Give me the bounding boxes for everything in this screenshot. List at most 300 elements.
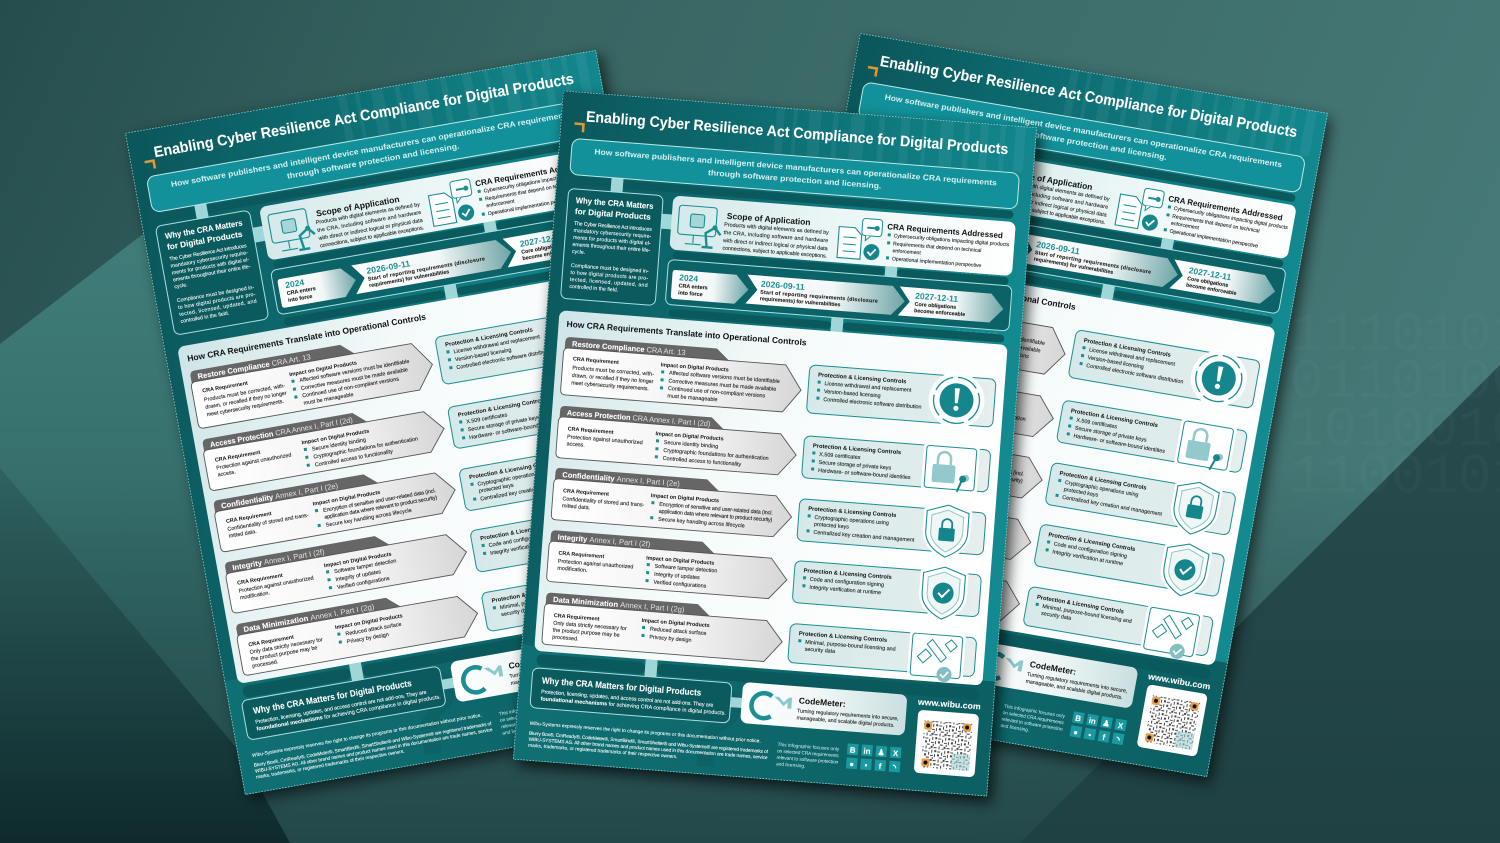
row: data minimization: Privacy by design xyxy=(649,635,692,644)
scope text xyxy=(313,191,425,249)
control: integrity xyxy=(792,556,982,622)
CodeMeter panel: CodeMeter: xyxy=(799,695,846,709)
binary pattern xyxy=(1214,245,1280,325)
timeline arrow 2024: CRA enters xyxy=(286,286,316,297)
row: access protection xyxy=(814,348,1059,439)
control: data minimization xyxy=(787,620,977,684)
row: integrity: Impact on Digital Products xyxy=(324,552,392,569)
control: access: X.509 certificates xyxy=(819,452,861,461)
requirements text: Requirements that depend on technical xyxy=(1172,214,1260,235)
control: data minimization: Minimal, purpose-bound licensing and xyxy=(1042,604,1132,625)
icon: shield with check xyxy=(597,496,647,555)
row: data minimization: Privacy by design xyxy=(887,585,930,598)
row: integrity: Integrity Annex I, Part I (2f) xyxy=(806,474,900,499)
binary pattern: 00101001 xyxy=(550,216,601,236)
legal text: WIBU-SYSTEMS AG. All other brand names and product names used in this documentation are trade names, service xyxy=(756,676,993,722)
control: confidentiality: Protection & Licensing Controls xyxy=(1059,471,1147,492)
control: data minimization: Minimal, purpose-bound licensing and xyxy=(805,640,896,653)
timeline xyxy=(939,211,1286,314)
row: data minimization: Only data strictly necessary for xyxy=(249,637,323,656)
control: integrity xyxy=(1033,519,1226,602)
binary pattern: 1010010 xyxy=(568,258,612,277)
subtitle box xyxy=(570,138,1020,209)
CodeMeter panel xyxy=(740,682,907,736)
row: confidentiality: Encryption of sensitive and user-related data (incl. xyxy=(659,502,773,517)
control: access: Hardware- or software-bound identities xyxy=(1073,433,1166,455)
legal text: marks, trademarks, or registered trademarks of their respective owners. xyxy=(528,743,678,760)
row: confidentiality: CRA Requirement xyxy=(563,488,609,498)
row: access protection: Impact on Digital Products xyxy=(301,429,370,446)
icon: dongles with check xyxy=(599,560,664,618)
binary pattern: 00101001 xyxy=(1222,262,1272,282)
edge dashes xyxy=(513,91,1037,796)
row: access protection: access. xyxy=(217,469,237,478)
legal text: WIBU-SYSTEMS AG. All other brand names and product names used in this documentation are trade names, service xyxy=(255,727,493,775)
row: integrity: Protection against unauthorized xyxy=(804,500,880,519)
row: restore compliance: must be manageable xyxy=(931,345,981,360)
row: data minimization: Only data strictly necessary for xyxy=(553,621,627,632)
icon: computer and robot arm xyxy=(957,158,1006,205)
callout: why the CRA matters xyxy=(761,607,965,680)
header stripes xyxy=(338,52,593,141)
row: access protection: Cryptographic foundations for authentication xyxy=(663,448,769,462)
row: confidentiality: application data where relevant to product security) xyxy=(910,460,1023,485)
row: access protection: CRA Requirement xyxy=(828,369,875,383)
control: access: Protection & Licensing Controls xyxy=(458,397,546,419)
row: access protection: CRA Requirement xyxy=(568,426,614,436)
connectors xyxy=(573,178,902,717)
note: relevant to software protection xyxy=(501,714,563,730)
row: access protection: Access Protection CRA Annex I, Part I (2d) xyxy=(567,408,711,428)
control: data minimization: security data xyxy=(1041,611,1072,622)
control: access: X.509 certificates xyxy=(1076,418,1118,430)
legal text: marks, trademarks, or registered trademarks of their respective owners. xyxy=(256,749,405,781)
row: restore compliance: Products must be corrected, with- xyxy=(839,309,921,328)
row: confidentiality xyxy=(551,467,794,538)
timeline arrow 2024: 2024 xyxy=(284,277,305,290)
timeline arrow 2026: requirements) for vulnerabilities xyxy=(760,296,841,308)
note: on selected CRA requirements xyxy=(500,707,563,724)
binary pattern: 1010010 xyxy=(1224,306,1268,325)
social icons: X xyxy=(1117,721,1125,731)
icon: document, key and check xyxy=(1115,184,1165,232)
legal text xyxy=(528,721,770,767)
control: data minimization: Minimal, purpose-bound licensing and xyxy=(500,590,590,611)
connectors xyxy=(806,124,1186,687)
title: Enabling Cyber Resilience Act Compliance for Digital Products xyxy=(879,53,1299,141)
control: data minimization: Protection & Licensing Controls xyxy=(799,631,887,644)
requirements text: Requirements that depend on technical xyxy=(893,241,982,254)
panel: why the CRA matters: controlled in the field. xyxy=(180,310,230,325)
control: restore: License withdrawal and replacement xyxy=(453,334,541,355)
icon: alert with arrows xyxy=(927,370,986,430)
requirements text: Cybersecurity obligations impacting digital products xyxy=(483,168,600,195)
panel: why the CRA matters: Compliance must be designed in- xyxy=(849,206,927,225)
control: restore: Protection & Licensing Controls xyxy=(445,327,533,349)
row: restore compliance: Corrective measures must be made available xyxy=(301,367,408,392)
row: restore compliance: Continued use of non-compliant versions xyxy=(302,376,400,399)
social icons: ▪ xyxy=(588,708,593,717)
timeline arrow 2027: become enforceable xyxy=(522,247,574,262)
social icons: f xyxy=(1102,733,1106,742)
control: access: X.509 certificates xyxy=(466,412,508,425)
row: restore compliance xyxy=(189,330,437,429)
row: integrity: Integrity of updates xyxy=(335,569,382,583)
subtitle box: through software protection and licensing. xyxy=(708,168,882,191)
row: restore compliance: meet cybersecurity requirements. xyxy=(571,380,649,392)
website: www.wibu.com xyxy=(1146,671,1212,692)
row: confidentiality: Impact on Digital Products xyxy=(651,493,719,504)
row: restore compliance: Impact on Digital Products xyxy=(289,360,357,378)
social icons xyxy=(567,686,625,720)
note: and licensing. xyxy=(776,761,806,770)
subtitle box: through software protection and licensing. xyxy=(995,124,1168,162)
row: access protection: Access Protection CRA Annex I, Part I (2d) xyxy=(209,415,354,449)
faint question mark: ? xyxy=(669,656,752,795)
control: data minimization: security data xyxy=(804,647,835,655)
row: data minimization: Data Minimization Annex I, Part I (2g) xyxy=(795,536,927,567)
connector bars xyxy=(568,181,1009,338)
control: access xyxy=(801,433,991,495)
control: data minimization xyxy=(481,558,674,639)
callout: why the CRA matters xyxy=(241,666,446,740)
section heading: How CRA Requirements Translate into Operational Controls xyxy=(838,262,1077,312)
requirements text: Operational implementation perspective xyxy=(892,256,982,269)
timeline arrow 2026 xyxy=(351,238,514,294)
legal text xyxy=(755,660,997,728)
icon: shield with check xyxy=(920,566,966,621)
row: confidentiality: Encryption of sensitive and user-related data (incl. xyxy=(323,488,437,514)
row: integrity: Integrity of updates xyxy=(654,572,700,581)
row: access protection: Protection against unauthorized xyxy=(216,452,292,472)
icon: shield with lock xyxy=(924,504,970,559)
QR code xyxy=(627,634,699,707)
control: confidentiality: Cryptographic operations using xyxy=(814,515,889,527)
row: confidentiality: Confidentiality of stored and trans- xyxy=(815,438,897,458)
scope text: the CRA, including software and hardware xyxy=(1004,187,1109,211)
title: Enabling Cyber Resilience Act Compliance for Digital Products xyxy=(153,71,575,161)
CodeMeter panel: Turning regulatory requirements into secure, xyxy=(797,708,899,722)
row: integrity xyxy=(791,471,1036,562)
row: confidentiality: CRA Requirement xyxy=(226,511,272,525)
timeline arrow 2026: Start of reporting requirements (disclosure xyxy=(1034,250,1151,276)
panel: why the CRA matters xyxy=(155,210,269,335)
callout: why the CRA matters: Protection, licensing, updates, and access control are not add-ons. They are xyxy=(255,690,427,726)
row: restore compliance: drawn, or recalled if they no longer xyxy=(572,373,654,385)
note: and licensing. xyxy=(1000,723,1030,734)
control: restore: Protection & Licensing Controls xyxy=(818,372,907,385)
poster background xyxy=(739,33,1328,777)
callout: why the CRA matters: Protection, licensing, updates, and access control are not add-ons. They are xyxy=(541,689,714,709)
panel: scope and requirements xyxy=(949,148,1297,259)
social icons: B xyxy=(1075,714,1082,724)
panel: why the CRA matters: ments for products with digital el- xyxy=(171,257,250,277)
control: confidentiality: protected keys xyxy=(814,522,849,531)
requirements text: Operational implementation perspective xyxy=(1169,229,1259,250)
row: confidentiality: Secure key handling across lifecycle xyxy=(325,508,412,529)
scope text: connections, subject to applicable exceptions. xyxy=(320,225,425,249)
CodeMeter panel: manageable, and scalable digital products. xyxy=(796,715,895,729)
scope text xyxy=(1001,168,1112,226)
panel: why the CRA matters: to how digital products are pro- xyxy=(847,213,925,232)
panel: why the CRA matters: Compliance must be designed in- xyxy=(176,285,255,304)
connectors xyxy=(194,154,576,717)
row: data minimization: CRA Requirement xyxy=(554,613,600,623)
edge dashes xyxy=(739,33,1328,777)
row: confidentiality xyxy=(802,409,1048,501)
note xyxy=(1000,704,1066,739)
row: access protection: Controlled access to functionality xyxy=(919,407,998,426)
requirements text: enforcement xyxy=(892,248,922,256)
row: restore compliance: drawn, or recalled if they no longer xyxy=(838,316,920,336)
row: data minimization xyxy=(542,592,785,663)
requirements text xyxy=(885,222,1011,271)
bottom band xyxy=(513,645,996,796)
edge dashes xyxy=(125,50,716,794)
control: confidentiality: protected keys xyxy=(1063,487,1099,499)
bottom band xyxy=(739,583,1228,777)
control: restore: Controlled electronic software distribution xyxy=(456,348,555,371)
binary pattern: 10100101 xyxy=(552,198,602,218)
control: data minimization: security data xyxy=(501,607,532,618)
control: access: Hardware- or software-bound identities xyxy=(818,468,911,481)
bottom band xyxy=(224,598,716,795)
row: integrity: Software tamper detection xyxy=(334,558,397,575)
control: restore: Controlled electronic software distribution xyxy=(823,397,922,411)
row: restore compliance: Continued use of non-compliant versions xyxy=(668,386,766,399)
row: integrity: Protection against unauthorized xyxy=(558,559,634,570)
legal text: Wibu-Systems expressly reserves the right to change its programs or this documentation without prior notice. xyxy=(252,713,482,759)
row: integrity: Software tamper detection xyxy=(900,514,963,531)
legal text: Wibu-Systems expressly reserves the right to change its programs or this documentation without prior notice. xyxy=(759,660,988,705)
row: confidentiality: Encryption of sensitive and user-related data (incl. xyxy=(911,453,1025,478)
scope text: with direct or indirect logical or physical data xyxy=(318,218,423,242)
poster background xyxy=(513,90,1037,796)
social icons: in xyxy=(863,747,871,756)
connector bars xyxy=(162,142,613,340)
poster shadow xyxy=(131,55,722,800)
control: restore: Version-based licensing xyxy=(824,389,881,399)
row: integrity: Impact on Digital Products xyxy=(892,505,961,523)
poster shadow xyxy=(518,97,1042,803)
row: access protection xyxy=(201,398,448,491)
panel: why the CRA matters: Compliance must be designed in- xyxy=(571,263,649,275)
legal text: Blurry Box®, CmReady®, CodeMeter®, SmartBind®, SmartShelter® and Wibu-Systems® are registered trademarks of xyxy=(757,669,995,716)
icon: document, key and check xyxy=(837,217,883,261)
row: access protection: Controlled access to functionality xyxy=(662,456,742,468)
requirements text xyxy=(474,158,604,218)
row: restore compliance: Products must be corrected, with- xyxy=(572,365,654,378)
subtitle box: How software publishers and intelligent device manufacturers can operationalize CRA requirements xyxy=(884,93,1284,170)
social icons: f xyxy=(602,705,607,714)
CodeMeter panel xyxy=(450,633,620,703)
control: restore xyxy=(434,301,629,389)
row: access protection xyxy=(556,406,798,476)
legal text: WIBU-SYSTEMS AG. All other brand names and product names used in this documentation are trade names, service xyxy=(528,737,768,761)
subtitle box xyxy=(858,82,1306,193)
panel: why the CRA matters: ements throughout their entire life- xyxy=(572,242,651,254)
QR code xyxy=(1137,684,1208,757)
control: integrity: Code and configuration signing xyxy=(1053,541,1127,560)
note: on selected CRA requirements xyxy=(1002,710,1065,726)
row: confidentiality: application data where relevant to product security) xyxy=(659,509,773,524)
row: data minimization: Reduced attack surface xyxy=(650,627,707,637)
row: data minimization: the product purpose may be xyxy=(792,569,859,586)
row: access protection: Secure identity binding xyxy=(312,437,367,453)
control: confidentiality xyxy=(458,432,652,516)
social icons: in xyxy=(583,693,592,703)
subtitle box: How software publishers and intelligent device manufacturers can operationalize CRA requirements xyxy=(170,110,572,189)
requirements text: Cybersecurity obligations impacting digital products xyxy=(1173,206,1289,231)
timeline arrow 2026 xyxy=(745,275,906,316)
row: integrity: Protection against unauthorized xyxy=(238,575,314,595)
row: access protection: access. xyxy=(566,441,585,449)
row: restore compliance: CRA Requirement xyxy=(202,381,249,395)
QR code xyxy=(914,710,979,777)
poster: right copy xyxy=(736,33,1333,796)
row: data minimization: the product purpose may be xyxy=(251,645,318,663)
social icons: ◝ xyxy=(615,702,622,712)
timeline arrow 2024 xyxy=(277,266,359,308)
social icons xyxy=(1069,711,1127,745)
row: restore compliance: meet cybersecurity requirements. xyxy=(836,323,915,343)
panel: why the CRA matters: controlled in the field. xyxy=(845,227,894,241)
lower connector bars xyxy=(249,616,677,691)
note: This infographic focuses only xyxy=(498,701,561,717)
panel: why the CRA matters: Why the CRA Matters xyxy=(164,218,244,241)
orange corner mark xyxy=(867,67,877,77)
callout: why the CRA matters xyxy=(530,668,732,723)
control: integrity: Code and configuration signing xyxy=(810,577,884,588)
timeline arrow 2024 xyxy=(945,222,1026,264)
row: access protection: Cryptographic foundations for authentication xyxy=(921,399,1026,423)
row: confidentiality: Confidentiality of stored and trans- xyxy=(227,513,309,533)
legal text: Blurry Box®, CmReady®, CodeMeter®, SmartBind®, SmartShelter® and Wibu-Systems® are registered trademarks of xyxy=(529,730,769,755)
panel: why the CRA matters: The Cyber Resilience Act introduces xyxy=(574,221,652,233)
social icons: ◝ xyxy=(892,763,897,772)
control: integrity: Code and configuration signing xyxy=(488,530,563,549)
timeline arrow 2024: 2024 xyxy=(955,225,976,238)
panel: why the CRA matters: tected, licensed, updated, and xyxy=(570,277,648,289)
control: restore: Controlled electronic software distribution xyxy=(1086,363,1184,386)
control: restore: License withdrawal and replacement xyxy=(824,381,912,394)
poster: left copy xyxy=(125,49,724,813)
row: confidentiality: application data where relevant to product security) xyxy=(324,495,438,521)
row: restore compliance: Continued use of non-compliant versions xyxy=(932,338,1030,360)
row: integrity: modification. xyxy=(239,590,271,602)
panel: why the CRA matters: Why the CRA Matters xyxy=(860,140,939,162)
scope text: Scope of Application xyxy=(1009,168,1093,192)
row: confidentiality: Confidentiality Annex I, Part I (2e) xyxy=(818,412,936,441)
CodeMeter panel: Turning regulatory requirements into secure, xyxy=(509,656,611,680)
row: data minimization: Impact on Digital Products xyxy=(881,567,949,585)
control: confidentiality: Cryptographic operations using xyxy=(1064,480,1139,498)
poster background xyxy=(125,50,716,795)
control: integrity: Protection & Licensing Controls xyxy=(1048,532,1136,553)
scope text: Scope of Application xyxy=(727,211,811,227)
control: confidentiality: Centralized key creation and management xyxy=(480,479,582,503)
row: restore compliance xyxy=(825,279,1071,377)
icon: dongles with check xyxy=(1139,603,1203,662)
timeline arrow 2024: into force xyxy=(288,294,313,304)
website: www.wibu.com xyxy=(917,697,982,712)
timeline arrow 2027: 2027-12-11 xyxy=(519,231,564,249)
binary pattern: 10100101 xyxy=(1230,246,1280,266)
row: confidentiality: Confidentiality Annex I, Part I (2e) xyxy=(220,481,339,510)
social icons: X xyxy=(613,688,620,698)
panel: why the CRA matters xyxy=(835,131,949,256)
timeline arrow 2027: 2027-12-11 xyxy=(1188,265,1232,282)
timeline arrow 2027 xyxy=(503,220,612,267)
row: restore compliance: Products must be corrected, with- xyxy=(204,383,286,403)
timeline arrow 2026: requirements) for vulnerabilities xyxy=(1033,256,1114,276)
row: integrity: CRA Requirement xyxy=(806,492,852,506)
control: integrity xyxy=(469,493,663,577)
control: access xyxy=(1056,397,1248,476)
row: data minimization: Reduced attack surface xyxy=(345,622,402,637)
panel: why the CRA matters: controlled in the field. xyxy=(569,284,618,294)
panel: why the CRA matters: The Cyber Resilience Act introduces xyxy=(856,164,934,183)
row: integrity: Software tamper detection xyxy=(654,564,718,575)
social icons: B xyxy=(850,746,856,755)
row: restore compliance: Corrective measures must be made available xyxy=(668,378,776,393)
panel: why the CRA matters: ements throughout their entire life- xyxy=(852,185,931,204)
section heading: How CRA Requirements Translate into Operational Controls xyxy=(566,319,807,347)
panel: why the CRA matters: The Cyber Resilience Act introduces xyxy=(169,243,248,263)
row: confidentiality: mitted data. xyxy=(228,529,258,540)
faint question mark: ? xyxy=(380,639,477,785)
control: confidentiality xyxy=(1044,457,1237,540)
control: integrity: Protection & Licensing Controls xyxy=(803,568,892,581)
row: data minimization: Data Minimization Annex I, Part I (2g) xyxy=(553,595,685,614)
header stripes xyxy=(774,107,1026,172)
CodeMeter panel: manageable, and scalable digital products. xyxy=(1025,679,1123,701)
callout: why the CRA matters: Why the CRA Matters for Digital Products xyxy=(252,678,412,716)
control: confidentiality: Protection & Licensing Controls xyxy=(808,506,897,519)
timeline arrow 2027: Core obligations xyxy=(1187,276,1229,289)
legal text: Wibu-Systems expressly reserves the right to change its programs or this documentation without prior notice. xyxy=(529,721,761,745)
orange corner mark xyxy=(145,161,155,170)
icon: shield with check xyxy=(1160,541,1210,599)
requirements text: Cybersecurity obligations impacting digital products xyxy=(893,233,1010,248)
row: integrity: modification. xyxy=(803,507,834,518)
timeline arrow 2026: 2026-09-11 xyxy=(761,279,805,292)
icon: alert with arrows xyxy=(1186,346,1251,411)
panel: why the CRA matters: ements throughout their entire life- xyxy=(173,264,251,283)
poster shadow xyxy=(743,40,1332,784)
section heading: How CRA Requirements Translate into Operational Controls xyxy=(186,312,427,363)
control: integrity: Integrity verification at runtime xyxy=(809,585,881,596)
requirements text: enforcement xyxy=(1170,221,1200,231)
poster: center copy xyxy=(512,90,1042,815)
CodeMeter panel: CodeMeter: xyxy=(1029,659,1077,677)
panel: why the CRA matters: to how digital products are pro- xyxy=(570,270,649,282)
note: This infographic focuses only xyxy=(1003,704,1066,720)
row: access protection: Secure identity binding xyxy=(922,391,977,406)
subtitle box: How software publishers and intelligent device manufacturers can operationalize CRA requirements xyxy=(594,147,998,188)
row: restore compliance: Restore Compliance CRA Art. 13 xyxy=(572,339,686,357)
social icons: X xyxy=(893,749,899,758)
row: restore compliance: Restore Compliance CRA Art. 13 xyxy=(197,352,311,381)
binary pattern: 1010010 xyxy=(955,328,999,343)
callout: why the CRA matters: foundational mechanisms for achieving CRA compliance in digital products. xyxy=(256,694,442,733)
icon: padlock and key xyxy=(1174,417,1237,474)
icon: alert with arrows xyxy=(554,303,619,368)
control: access: Secure storage of private keys xyxy=(467,415,541,433)
panel: scope and requirements xyxy=(259,147,609,261)
scope text: Products with digital elements as defined by xyxy=(315,202,421,226)
row: access protection: Secure identity binding xyxy=(664,440,718,450)
